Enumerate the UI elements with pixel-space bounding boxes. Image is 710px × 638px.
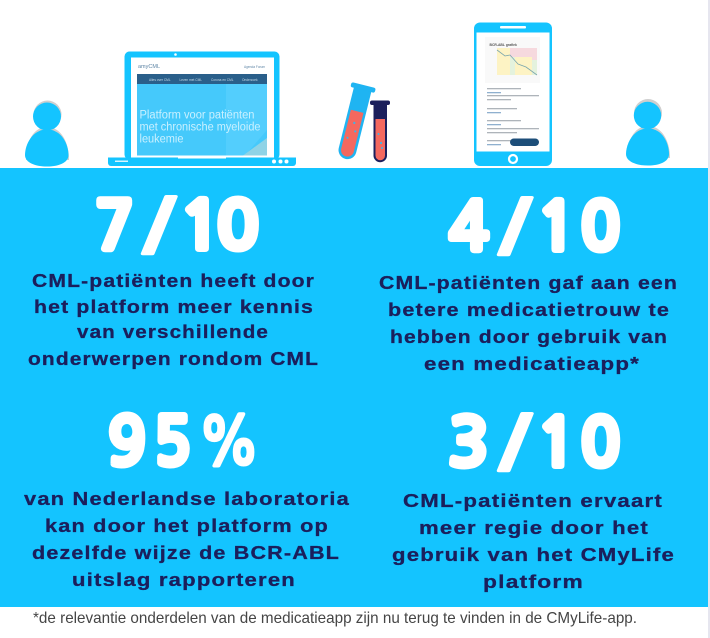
app button: [510, 138, 539, 146]
website hero image: met chronische myeloide: [140, 122, 260, 134]
text: 95% description: [24, 488, 350, 590]
number 4/10: [449, 184, 620, 271]
text: 3/10 description: platform: [483, 571, 584, 592]
number 3/10: [448, 400, 620, 487]
text: 4/10 description: [379, 272, 678, 374]
statistic: 7/10: [28, 183, 319, 369]
text: 95% description: van Nederlandse laboratoria: [24, 488, 350, 509]
website hero image: leukemie: [140, 134, 184, 146]
icon: smartphone with medication app: [474, 22, 552, 166]
statistic: 95%: [24, 409, 350, 590]
website nav bar: Corona en CML: [211, 78, 234, 82]
icon: person right: [626, 99, 670, 166]
text: 3/10 description: meer regie door het: [419, 517, 649, 538]
website header links: Agenda Forum: [244, 65, 265, 69]
number 3/10: 10: [536, 410, 620, 476]
website nav bar: [137, 74, 267, 84]
text: 4/10 description: hebben door gebruik van: [390, 326, 668, 347]
blue background panel: [0, 168, 708, 607]
website hero image: Platform voor patiënten: [140, 110, 254, 122]
text: 4/10 description: betere medicatietrouw te: [388, 299, 670, 320]
number 4/10: 10: [536, 194, 620, 260]
number 95%: [108, 409, 260, 475]
text: 95% description: kan door het platform op: [45, 515, 329, 536]
number 4/10: 4: [449, 194, 489, 260]
number 3/10: /: [499, 400, 532, 487]
website nav bar: Alles over CML: [149, 78, 171, 82]
text: 7/10 description: onderwerpen rondom CML: [28, 348, 319, 369]
number 7/10: 10: [179, 195, 259, 260]
app chart: [490, 43, 537, 75]
text: 4/10 description: een medicatieapp*: [424, 353, 640, 374]
statistic: 4/10: [379, 184, 678, 374]
statistic: 3/10: [392, 400, 675, 592]
number 4/10: /: [499, 184, 532, 271]
number 7/10: 7: [95, 193, 134, 259]
text: 7/10 description: van verschillende: [77, 321, 269, 342]
number 3/10: 3: [448, 410, 489, 476]
text: 95% description: uitslag rapporteren: [72, 569, 296, 590]
app chart: BCR-ABL grafiek: [490, 43, 517, 47]
icon: test tubes: [333, 82, 390, 162]
text: 7/10 description: [28, 270, 319, 369]
website hero image: [137, 84, 267, 156]
text: 7/10 description: het platform meer kennis: [34, 296, 314, 317]
icon: person left: [25, 100, 69, 166]
number 95%: 5: [154, 409, 191, 475]
text: 3/10 description: CML-patiënten ervaart: [403, 490, 663, 511]
icon: laptop with platform website: [108, 52, 296, 166]
text: 7/10 description: CML-patiënten heeft door: [32, 270, 315, 291]
number 7/10: [95, 183, 259, 270]
footnote: *de relevantie onderdelen van de medicatieapp zijn nu terug te vinden in de CMyLife-app.: [33, 610, 637, 627]
number 95%: %: [198, 409, 260, 475]
text: 3/10 description: [392, 490, 675, 592]
number 7/10: /: [143, 183, 176, 270]
text: 95% description: dezelfde wijze de BCR-ABL: [32, 542, 340, 563]
website nav bar: Onderzoek: [242, 78, 258, 82]
number 95%: 9: [108, 409, 146, 475]
app result list: [487, 88, 539, 145]
text: 3/10 description: gebruik van het CMyLife: [392, 544, 675, 565]
website nav bar: Leven met CML: [180, 78, 202, 82]
text: 4/10 description: CML-patiënten gaf aan een: [379, 272, 678, 293]
website logo: amyCML: [138, 64, 160, 70]
